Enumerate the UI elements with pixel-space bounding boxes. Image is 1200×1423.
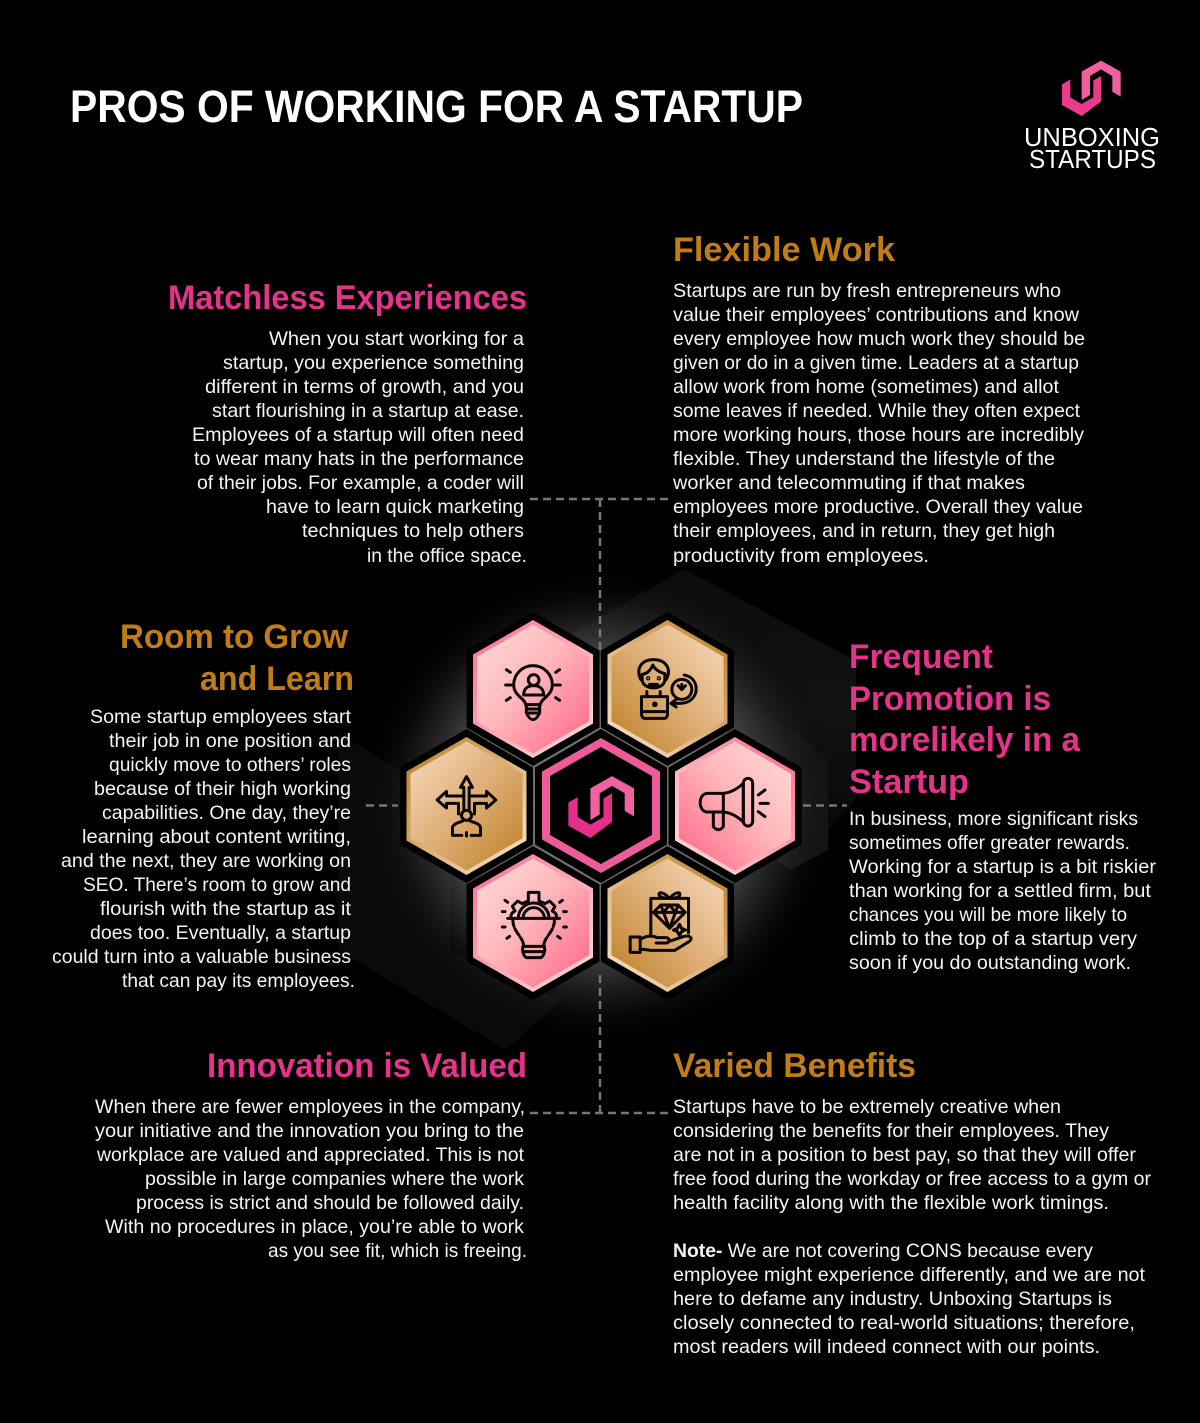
body text: of their jobs. For example, a coder will bbox=[197, 472, 524, 494]
body text: because of their high working bbox=[94, 778, 351, 800]
heading: Promotion is bbox=[849, 680, 1051, 718]
icon: crossroads arrows and person bbox=[437, 777, 496, 836]
body text: your initiative and the innovation you bring to the bbox=[95, 1120, 524, 1142]
body text: With no procedures in place, you’re able to work bbox=[105, 1216, 524, 1238]
note bbox=[673, 1240, 1146, 1358]
body text: different in terms of growth, and you bbox=[205, 376, 524, 398]
body text: that can pay its employees. bbox=[122, 970, 355, 992]
logo wordmark: STARTUPS bbox=[1029, 144, 1156, 174]
panel: room to grow and learn bbox=[52, 618, 355, 992]
panel: varied benefits bbox=[673, 1047, 1151, 1358]
body text: could turn into a valuable business bbox=[52, 946, 351, 968]
body text: Startups have to be extremely creative when bbox=[673, 1096, 1061, 1118]
body text: to wear many hats in the performance bbox=[194, 448, 524, 470]
body text bbox=[673, 1096, 1151, 1214]
body text: some leaves if needed. While they often expect bbox=[673, 400, 1081, 422]
heading bbox=[849, 638, 1081, 801]
heading: Startup bbox=[849, 763, 969, 801]
body text: chances you will be more likely to bbox=[849, 904, 1127, 926]
heading: Room to Grow bbox=[120, 618, 349, 656]
note: closely connected to real-world situations; therefore, bbox=[673, 1312, 1135, 1334]
body text: as you see fit, which is freeing. bbox=[268, 1240, 527, 1262]
body text: possible in large companies where the work bbox=[145, 1168, 524, 1190]
icon: worker with laptop and clock bbox=[639, 660, 696, 718]
body text: given or do in a given time. Leaders at a startup bbox=[673, 352, 1079, 374]
heading: Frequent bbox=[849, 638, 993, 676]
hexagon: innovation icon bbox=[466, 846, 600, 1000]
background hexagon shapes bbox=[338, 569, 856, 1050]
body text: In business, more significant risks bbox=[849, 808, 1138, 830]
body text: productivity from employees. bbox=[673, 545, 929, 567]
body text: does too. Eventually, a startup bbox=[90, 922, 351, 944]
body text: considering the benefits for their employees. They bbox=[673, 1120, 1109, 1142]
body text: worker and telecommuting if that makes bbox=[672, 472, 1025, 494]
body text: value their employees’ contributions and know bbox=[673, 304, 1080, 326]
body text: allow work from home (sometimes) and allot bbox=[673, 376, 1060, 398]
hexagon: flexible work icon bbox=[601, 612, 734, 766]
body text: in the office space. bbox=[367, 545, 527, 567]
panel: flexible work bbox=[672, 231, 1085, 567]
body text: Startups are run by fresh entrepreneurs who bbox=[673, 280, 1061, 302]
body text bbox=[672, 280, 1085, 567]
body text: When you start working for a bbox=[269, 328, 524, 350]
hexagon: center logo bbox=[535, 729, 667, 883]
body text: every employee how much work they should be bbox=[673, 328, 1085, 350]
body text: flexible. They understand the lifestyle of the bbox=[673, 448, 1055, 470]
body text: health facility along with the flexible work timings. bbox=[673, 1192, 1109, 1214]
body text: Employees of a startup will often need bbox=[192, 424, 524, 446]
note: Note- We are not covering CONS because every bbox=[673, 1240, 1093, 1262]
body text: their job in one position and bbox=[109, 730, 351, 752]
logo mark bbox=[1062, 61, 1121, 116]
body text bbox=[95, 1096, 527, 1262]
body text: quickly move to others’ roles bbox=[109, 754, 351, 776]
panel: frequent promotion bbox=[849, 638, 1157, 974]
body text: employees more productive. Overall they value bbox=[673, 496, 1083, 518]
heading: Innovation is Valued bbox=[207, 1047, 527, 1085]
body text: have to learn quick marketing bbox=[266, 496, 524, 518]
body text: SEO. There’s room to grow and bbox=[83, 874, 351, 896]
body text: sometimes offer greater rewards. bbox=[849, 832, 1130, 854]
body text: workplace are valued and appreciated. This is not bbox=[96, 1144, 525, 1166]
icon: lightbulb with person bbox=[506, 666, 560, 720]
body text bbox=[52, 706, 355, 992]
icon: hand holding diamond gift bbox=[630, 893, 691, 952]
body text: free food during the workday or free access to a gym or bbox=[673, 1168, 1151, 1190]
body text: than working for a settled firm, but bbox=[849, 880, 1152, 902]
body text: Some startup employees start bbox=[90, 706, 352, 728]
logo wordmark bbox=[1024, 122, 1160, 174]
central glow bbox=[360, 566, 840, 1046]
body text: start flourishing in a startup at ease. bbox=[212, 400, 524, 422]
icon: gear lightbulb bbox=[502, 892, 566, 958]
connector lines bbox=[366, 499, 847, 1113]
body text: When there are fewer employees in the company, bbox=[95, 1096, 525, 1118]
heading: Varied Benefits bbox=[673, 1047, 916, 1085]
body text: capabilities. One day, they’re bbox=[102, 802, 351, 824]
panel: matchless experiences bbox=[168, 279, 527, 567]
body text bbox=[849, 808, 1157, 974]
body text: soon if you do outstanding work. bbox=[849, 952, 1131, 974]
body text: startup, you experience something bbox=[223, 352, 524, 374]
heading: morelikely in a bbox=[849, 721, 1081, 759]
body text: more working hours, those hours are incredibly bbox=[673, 424, 1084, 446]
hexagon cluster bbox=[400, 612, 802, 1000]
body text: techniques to help others bbox=[302, 520, 524, 542]
hexagon: room to grow icon bbox=[400, 729, 533, 883]
body text: learning about content writing, bbox=[82, 826, 351, 848]
hexagon: matchless experiences icon bbox=[466, 612, 600, 766]
body text: their employees, and in return, they get high bbox=[673, 520, 1055, 542]
body text: are not in a position to best pay, so that they will offer bbox=[673, 1144, 1137, 1166]
body text: flourish with the startup as it bbox=[100, 898, 352, 920]
note: employee might experience differently, and we are not bbox=[673, 1264, 1146, 1286]
body text bbox=[192, 328, 527, 567]
title: PROS OF WORKING FOR A STARTUP bbox=[70, 81, 803, 132]
icon: megaphone bbox=[700, 778, 768, 830]
heading: Matchless Experiences bbox=[168, 279, 527, 317]
panel: innovation is valued bbox=[95, 1047, 527, 1262]
body text: climb to the top of a startup very bbox=[849, 928, 1137, 950]
body text: process is strict and should be followed daily. bbox=[136, 1192, 524, 1214]
body text: Working for a startup is a bit riskier bbox=[849, 856, 1157, 878]
brand logo bbox=[1024, 61, 1160, 174]
heading: Flexible Work bbox=[673, 231, 895, 269]
hexagon: frequent promotion icon bbox=[668, 729, 802, 883]
logo wordmark: UNBOXING bbox=[1024, 122, 1160, 152]
hexagon: varied benefits icon bbox=[601, 846, 734, 1000]
note: most readers will indeed connect with our points. bbox=[673, 1336, 1100, 1358]
heading bbox=[120, 618, 354, 698]
body text: and the next, they are working on bbox=[61, 850, 351, 872]
heading: and Learn bbox=[200, 660, 354, 698]
icon: brand mark bbox=[568, 776, 634, 838]
note: here to defame any industry. Unboxing Startups is bbox=[673, 1288, 1112, 1310]
